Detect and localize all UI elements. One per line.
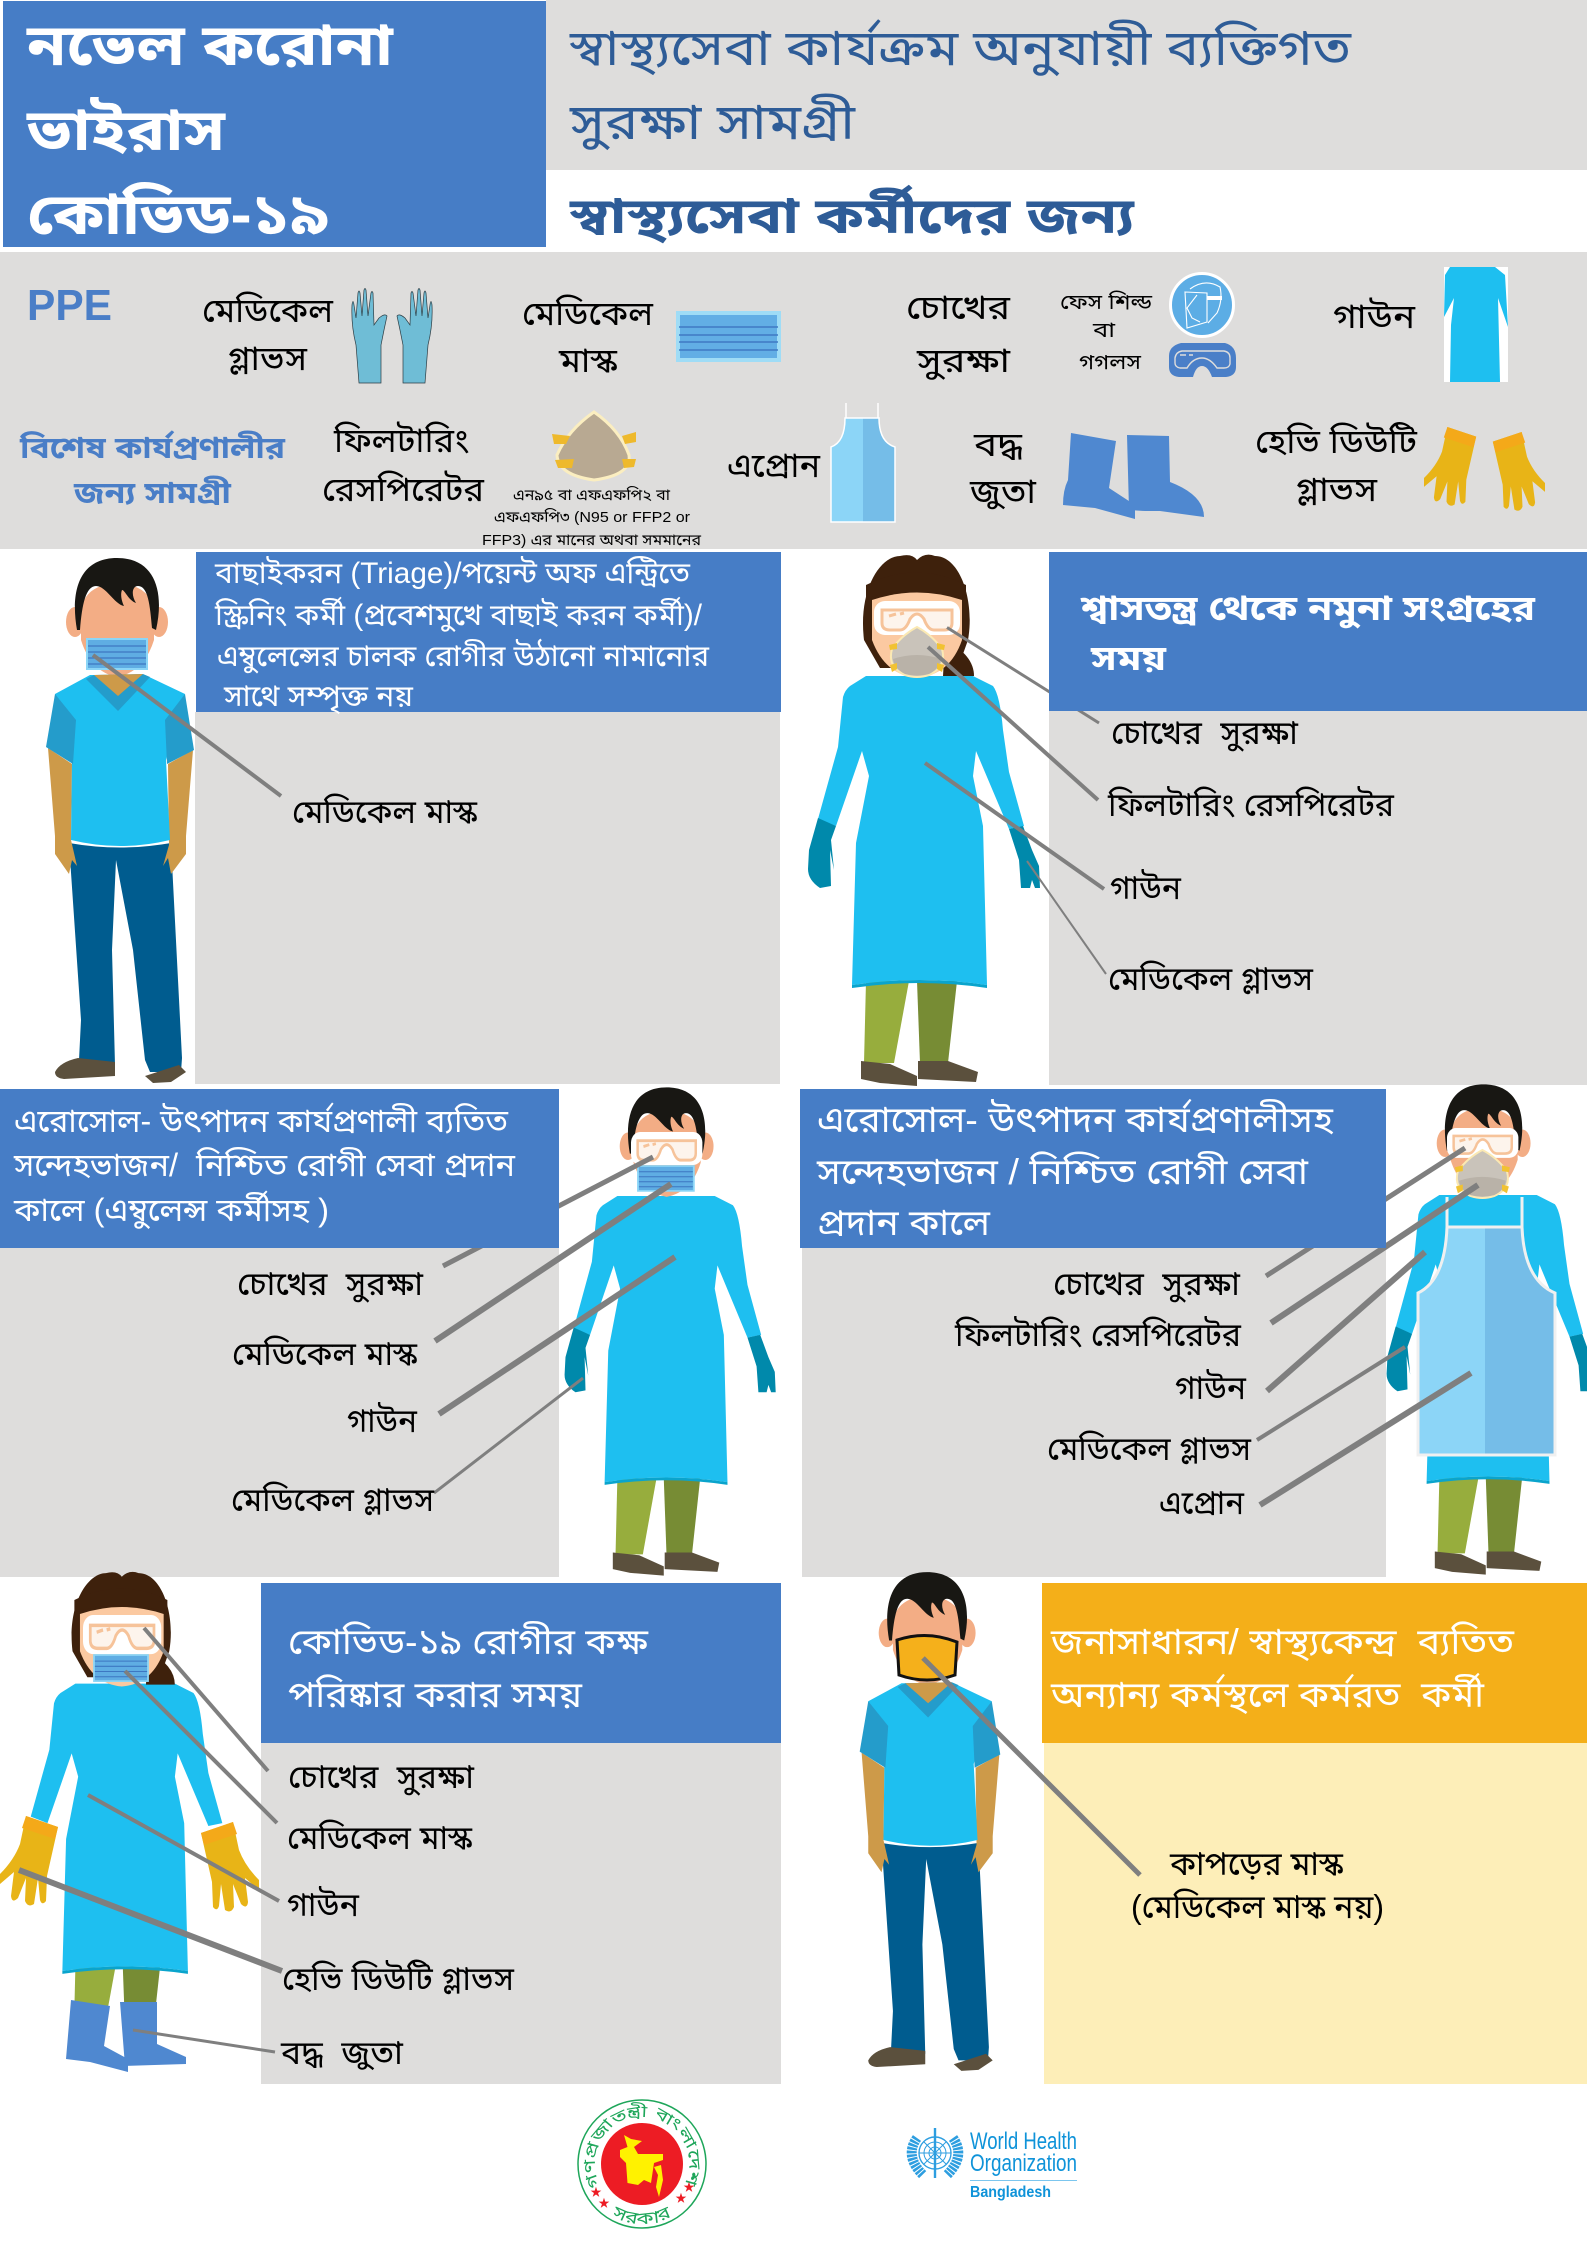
panel: respiratory sampling bbox=[808, 552, 1587, 1086]
legend: heavy duty gloves bbox=[1255, 422, 1545, 511]
labels: ফিলটারিং রেসপিরেটর bbox=[954, 1315, 1241, 1353]
panel heading bbox=[800, 1089, 1386, 1248]
figure: woman in gown with respirator bbox=[808, 555, 1040, 1086]
label: medical mask: মেডিকেল মাস্ক bbox=[292, 792, 478, 830]
icon: apron bbox=[831, 403, 895, 522]
legend: gown bbox=[1333, 267, 1508, 382]
panel heading: বাছাইকরন (Triage)/পয়েন্ট অফ এন্ট্রিতে bbox=[214, 555, 691, 590]
legend: eye protection: চোখের bbox=[906, 289, 1011, 327]
labels: বদ্ধ জুতা bbox=[280, 2034, 404, 2071]
logo: Government of Bangladesh seal: ★ bbox=[683, 2179, 695, 2195]
labels: গাউন bbox=[1110, 868, 1182, 906]
title: novel coronavirus covid-19: ভাইরাস bbox=[26, 96, 226, 163]
legend: medical gloves: গ্লাভস bbox=[228, 340, 308, 378]
logo: Government of Bangladesh seal: ★ bbox=[590, 2184, 602, 2200]
legend: filtering respirator: ফিলটারিং bbox=[333, 421, 469, 460]
figure: man in gown, apron and respirator bbox=[1387, 1084, 1587, 1575]
title: novel coronavirus covid-19 bbox=[26, 13, 394, 247]
labels: হেভি ডিউটি গ্লাভস bbox=[282, 1959, 514, 1997]
icon: WHO emblem bbox=[912, 2128, 958, 2178]
panel heading: কালে (এম্বুলেন্স কর্মীসহ ) bbox=[13, 1190, 329, 1229]
legend: eye protection: সুরক্ষা bbox=[916, 342, 1011, 380]
heading: PPE: PPE bbox=[27, 281, 112, 330]
leader line bbox=[93, 655, 281, 796]
labels: মেডিকেল গ্লাভস bbox=[231, 1480, 434, 1518]
panel heading: পরিষ্কার করার সময় bbox=[288, 1673, 582, 1715]
panel heading: সন্দেহভাজন / নিশ্চিত রোগী সেবা bbox=[816, 1150, 1308, 1192]
title: novel coronavirus covid-19: কোভিড-১৯ bbox=[27, 181, 329, 247]
panel: triage and screening bbox=[46, 552, 781, 1084]
labels: গাউন bbox=[1175, 1368, 1247, 1406]
logo: Government of Bangladesh seal: ★ bbox=[675, 2190, 687, 2206]
legend: filtering respirator: FFP3) এর মানের অথবা সমমানের bbox=[482, 532, 702, 549]
leader lines bbox=[434, 1157, 675, 1493]
figure: man in gown with mask bbox=[565, 1087, 776, 1576]
icon: respirator bbox=[552, 412, 636, 480]
labels bbox=[1107, 714, 1394, 997]
label: cloth mask: কাপড়ের মাস্ক bbox=[1169, 1845, 1344, 1882]
legend: filtering respirator: এন৯৫ বা এফএফপি২ বা bbox=[513, 487, 671, 504]
labels bbox=[954, 1265, 1251, 1521]
labels: মেডিকেল গ্লাভস bbox=[1047, 1429, 1251, 1467]
panel: cleaning patient room bbox=[0, 1572, 781, 2084]
logo: World Health Organization Bangladesh: Organization bbox=[970, 2150, 1077, 2177]
panel heading bbox=[1042, 1583, 1587, 1743]
labels bbox=[231, 1265, 434, 1518]
label: cloth mask bbox=[1131, 1845, 1384, 1925]
logo: Government of Bangladesh seal: সরকার bbox=[614, 2206, 670, 2224]
panel heading bbox=[261, 1583, 781, 1743]
panel heading: এরোসোল- উৎপাদন কার্যপ্রণালীসহ bbox=[817, 1098, 1334, 1140]
figure: woman with boots and heavy gloves bbox=[0, 1572, 259, 2072]
legend: eye protection bbox=[906, 274, 1236, 380]
logo: Government of Bangladesh seal: গণপ্রজাতন্ত্রী বাংলাদেশ bbox=[584, 2102, 700, 2188]
labels: গাউন bbox=[287, 1885, 360, 1923]
subtitle text: সুরক্ষা সামগ্রী bbox=[569, 94, 856, 151]
panel heading: প্রদান কালে bbox=[817, 1202, 991, 1243]
logo: World Health Organization Bangladesh: Bangladesh bbox=[970, 2184, 1051, 2201]
label: cloth mask: (মেডিকেল মাস্ক নয়) bbox=[1131, 1887, 1384, 1925]
labels: ফিলটারিং রেসপিরেটর bbox=[1107, 785, 1394, 823]
legend: eye protection: ফেস শিল্ড bbox=[1060, 290, 1153, 314]
panel heading: এরোসোল- উৎপাদন কার্যপ্রণালী ব্যতিত bbox=[14, 1102, 508, 1139]
legend: medical mask bbox=[522, 294, 779, 380]
legend: apron: এপ্রোন bbox=[727, 447, 821, 485]
legend: eye protection: গগলস bbox=[1079, 351, 1142, 374]
panel heading: সাথে সম্পৃক্ত নয় bbox=[223, 680, 414, 715]
panel: general public workers bbox=[860, 1572, 1587, 2084]
icon: face shield bbox=[1170, 274, 1234, 336]
icon: medical gloves bbox=[352, 288, 432, 383]
panel heading: কোভিড-১৯ রোগীর কক্ষ bbox=[288, 1620, 649, 1662]
legend: filtering respirator: রেসপিরেটর bbox=[322, 470, 485, 509]
legend: closed shoes: বদ্ধ bbox=[973, 426, 1023, 464]
labels: মেডিকেল মাস্ক bbox=[287, 1818, 473, 1856]
panel: title block bbox=[3, 1, 546, 247]
panel heading bbox=[1049, 552, 1587, 711]
labels: চোখের সুরক্ষা bbox=[237, 1265, 424, 1303]
icon: medical mask bbox=[678, 313, 779, 360]
heading: for health workers: স্বাস্থ্যসেবা কর্মীদের জন্য bbox=[569, 183, 1135, 244]
logo: Government of Bangladesh seal bbox=[577, 2099, 707, 2229]
labels: চোখের সুরক্ষা bbox=[1053, 1265, 1241, 1303]
legend: gown: গাউন bbox=[1333, 297, 1416, 336]
panel heading: সময় bbox=[1090, 639, 1166, 678]
panel heading bbox=[196, 552, 781, 715]
figure: man with cloth mask bbox=[860, 1572, 1000, 2071]
logo: World Health Organization Bangladesh: World Health bbox=[970, 2128, 1077, 2155]
legend: medical gloves: মেডিকেল bbox=[202, 291, 334, 330]
legend: filtering respirator bbox=[322, 412, 702, 549]
labels: এপ্রোন bbox=[1159, 1484, 1245, 1521]
panel heading: এম্বুলেন্সের চালক রোগীর উঠানো নামানোর bbox=[217, 637, 710, 673]
leader line bbox=[923, 1658, 1140, 1875]
subtitle text bbox=[569, 19, 1352, 151]
labels: গাউন bbox=[347, 1401, 418, 1439]
leader lines bbox=[925, 628, 1106, 974]
legend: closed shoes bbox=[969, 426, 1204, 519]
legend: heavy duty gloves: গ্লাভস bbox=[1296, 471, 1378, 509]
labels: চোখের সুরক্ষা bbox=[288, 1758, 475, 1796]
figure: man with medical mask bbox=[46, 558, 194, 1083]
icon: goggles bbox=[1169, 343, 1236, 377]
legend: heavy duty gloves: হেভি ডিউটি bbox=[1255, 422, 1417, 461]
legend: filtering respirator: এফএফপি৩ (N95 or FFP2 or bbox=[494, 509, 690, 526]
legend: apron bbox=[727, 403, 895, 522]
labels: মেডিকেল মাস্ক bbox=[232, 1334, 418, 1372]
panel heading: শ্বাসতন্ত্র থেকে নমুনা সংগ্রহের bbox=[1080, 589, 1536, 629]
labels: চোখের সুরক্ষা bbox=[1111, 714, 1299, 752]
panel: care with aerosol procedures bbox=[800, 1084, 1587, 1577]
heading: special procedures bbox=[19, 430, 286, 510]
heading: special procedures: বিশেষ কার্যপ্রণালীর bbox=[19, 430, 286, 465]
apron on figure bbox=[1418, 1197, 1555, 1455]
title: novel coronavirus covid-19: নভেল করোনা bbox=[26, 13, 394, 78]
logo: World Health Organization Bangladesh bbox=[912, 2128, 1077, 2201]
leader lines bbox=[1257, 1148, 1478, 1505]
icon: heavy duty gloves bbox=[1424, 427, 1545, 511]
panel: subtitle band bbox=[546, 0, 1587, 170]
subtitle text: স্বাস্থ্যসেবা কার্যক্রম অনুযায়ী ব্যক্তিগত bbox=[569, 19, 1352, 77]
leader lines bbox=[19, 1628, 282, 2052]
legend: closed shoes: জুতা bbox=[969, 473, 1037, 511]
labels: মেডিকেল গ্লাভস bbox=[1108, 959, 1313, 997]
legend: medical gloves bbox=[202, 288, 432, 383]
icon: boots bbox=[1063, 433, 1204, 519]
panel: PPE legend bbox=[0, 252, 1587, 549]
labels bbox=[280, 1758, 514, 2071]
icon: gown bbox=[1444, 267, 1508, 382]
panel heading: জনাসাধারন/ স্বাস্থ্যকেন্দ্র ব্যতিত bbox=[1050, 1620, 1515, 1663]
heading: special procedures: জন্য সামগ্রী bbox=[73, 475, 232, 510]
panel heading: অন্যান্য কর্মস্থলে কর্মরত কর্মী bbox=[1050, 1672, 1484, 1716]
panel: care without aerosol procedures bbox=[0, 1087, 776, 1577]
legend: medical mask: মাস্ক bbox=[558, 342, 618, 380]
panel heading: স্ক্রিনিং কর্মী (প্রবেশমুখে বাছাই করন কর্মী)/ bbox=[214, 595, 703, 632]
logo: Government of Bangladesh seal: ★ bbox=[598, 2195, 610, 2211]
panel heading: সন্দেহভাজন/ নিশ্চিত রোগী সেবা প্রদান bbox=[13, 1147, 516, 1183]
legend: medical mask: মেডিকেল bbox=[522, 294, 654, 333]
legend: eye protection: বা bbox=[1092, 319, 1115, 342]
panel heading bbox=[0, 1089, 559, 1248]
